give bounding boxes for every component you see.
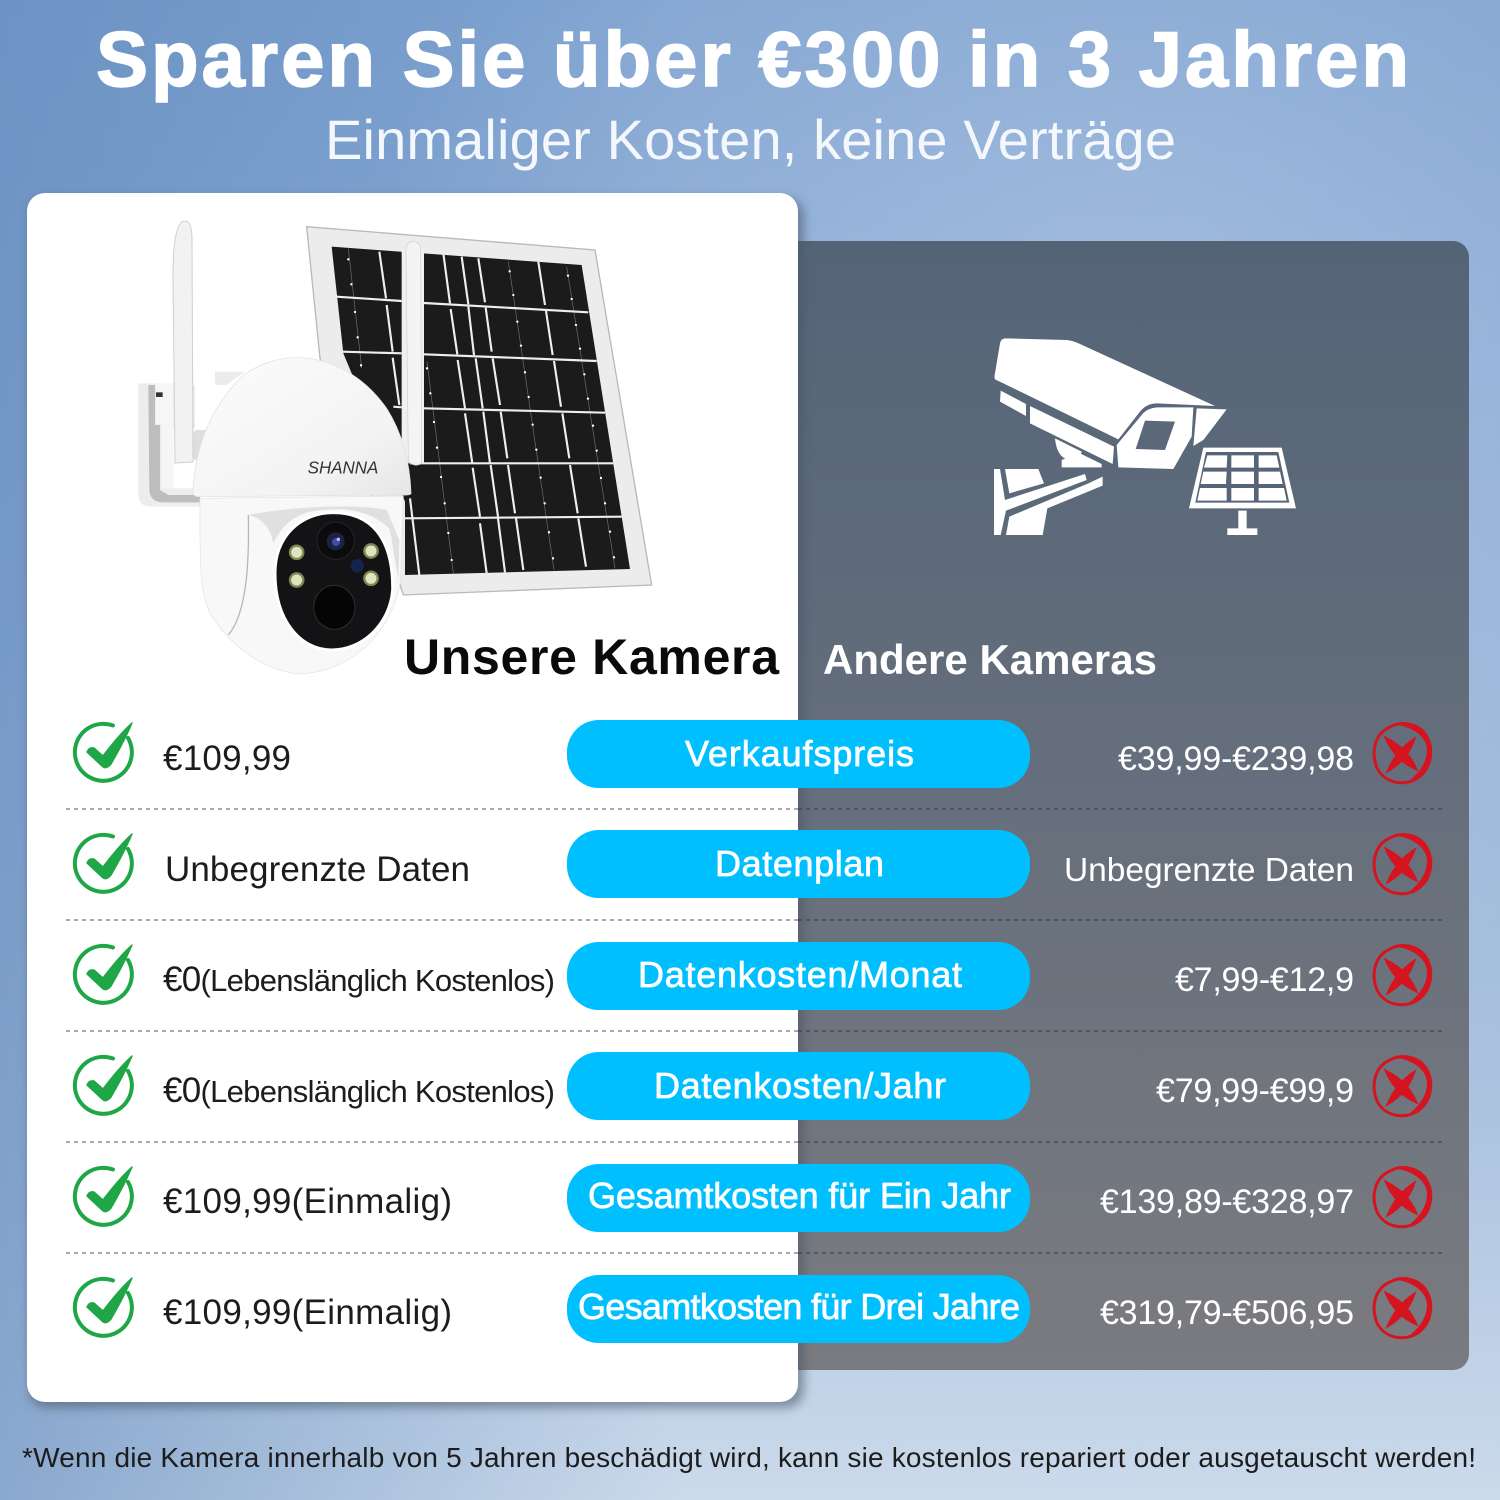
pill label: Gesamtkosten für Ein Jahr (588, 1175, 1011, 1216)
other value: €7,99-€12,9 (1175, 961, 1354, 999)
pir sensor (314, 585, 355, 629)
panel shadow (29, 198, 804, 1408)
other value: €79,99-€99,9 (1156, 1072, 1354, 1110)
icon: check (75, 723, 132, 781)
camera sun hood (1193, 408, 1227, 446)
icon: cross (1374, 724, 1431, 783)
other value: €39,99-€239,98 (1118, 740, 1354, 778)
pill label: Verkaufspreis (685, 733, 914, 774)
heading: andere kameras: Andere Kameras (823, 636, 1157, 683)
camera housing (994, 338, 1215, 439)
row: Gesamtkosten für Ein Jahr (75, 1164, 1431, 1232)
pill label (567, 942, 1030, 1010)
icon: check (75, 1167, 132, 1225)
camera face (275, 513, 393, 650)
icon: cross (1374, 946, 1431, 1005)
our value: €0(Lebenslänglich Kostenlos) (163, 960, 555, 999)
body seam (228, 515, 249, 635)
pill label: Gesamtkosten für Drei Jahre (578, 1286, 1020, 1327)
camera mount arm (994, 469, 1103, 535)
panel: unsere kamera (27, 193, 798, 1402)
our value: €109,99(Einmalig) (163, 1293, 452, 1332)
icon: cctv camera with solar panel (994, 338, 1296, 535)
pill label (567, 1164, 1030, 1232)
row dividers (66, 809, 1444, 1253)
pill label (567, 1275, 1030, 1343)
face recess (248, 506, 399, 580)
title: Sparen Sie über €300 in 3 Jahren (96, 15, 1409, 103)
pill label (567, 830, 1030, 898)
antenna gap strip (402, 248, 424, 463)
wall bracket (138, 372, 245, 507)
leds (290, 544, 378, 587)
row: Datenplan (75, 830, 1431, 898)
pill label (567, 1052, 1030, 1120)
row: Gesamtkosten für Drei Jahre (75, 1275, 1431, 1343)
icon: cross (1374, 1279, 1431, 1338)
our value: €0(Lebenslänglich Kostenlos) (163, 1071, 555, 1110)
heading: unsere kamera: Unsere Kamera (404, 629, 780, 685)
icon: check (75, 834, 132, 892)
pill label: Datenplan (715, 843, 884, 884)
subtitle: Einmaliger Kosten, keine Verträge (325, 108, 1176, 171)
other value: Unbegrenzte Daten (1064, 852, 1354, 889)
icon: cross (1374, 1168, 1431, 1227)
pill label (567, 720, 1030, 788)
solar panel icon (1189, 448, 1296, 535)
row: Datenkosten/Monat (75, 942, 1431, 1010)
camera lens (317, 522, 354, 559)
icon: cross (1374, 1057, 1431, 1116)
camera front with lens (1117, 407, 1193, 469)
camera joint (1055, 438, 1102, 467)
icon: check (75, 1056, 132, 1114)
icon: check (75, 945, 132, 1003)
pill label: Datenkosten/Monat (638, 954, 962, 995)
pill label: Datenkosten/Jahr (654, 1065, 946, 1106)
solar panel (307, 227, 652, 595)
camera dome (193, 358, 411, 497)
footnote: *Wenn die Kamera innerhalb von 5 Jahren beschädigt wird, kann sie kostenlos repariert oder ausgetauscht werden! (22, 1442, 1476, 1473)
camera side plates (1000, 391, 1114, 464)
right antenna (406, 242, 422, 465)
brand logo: SHANNA (308, 457, 378, 477)
other value: €319,79-€506,95 (1100, 1294, 1354, 1332)
ir sensor (351, 559, 364, 572)
other value: €139,89-€328,97 (1100, 1183, 1354, 1221)
icon: cross (1374, 835, 1431, 894)
icon: check (75, 1278, 132, 1336)
our value: €109,99 (163, 739, 291, 778)
row: Datenkosten/Jahr (75, 1052, 1431, 1120)
our value: Unbegrenzte Daten (165, 850, 470, 889)
product photo: solar camera (138, 221, 652, 674)
row: Verkaufspreis (75, 720, 1431, 788)
left antenna (173, 221, 193, 463)
panel: andere kameras (780, 241, 1469, 1370)
camera lower body (200, 496, 403, 674)
our value: €109,99(Einmalig) (163, 1182, 452, 1221)
